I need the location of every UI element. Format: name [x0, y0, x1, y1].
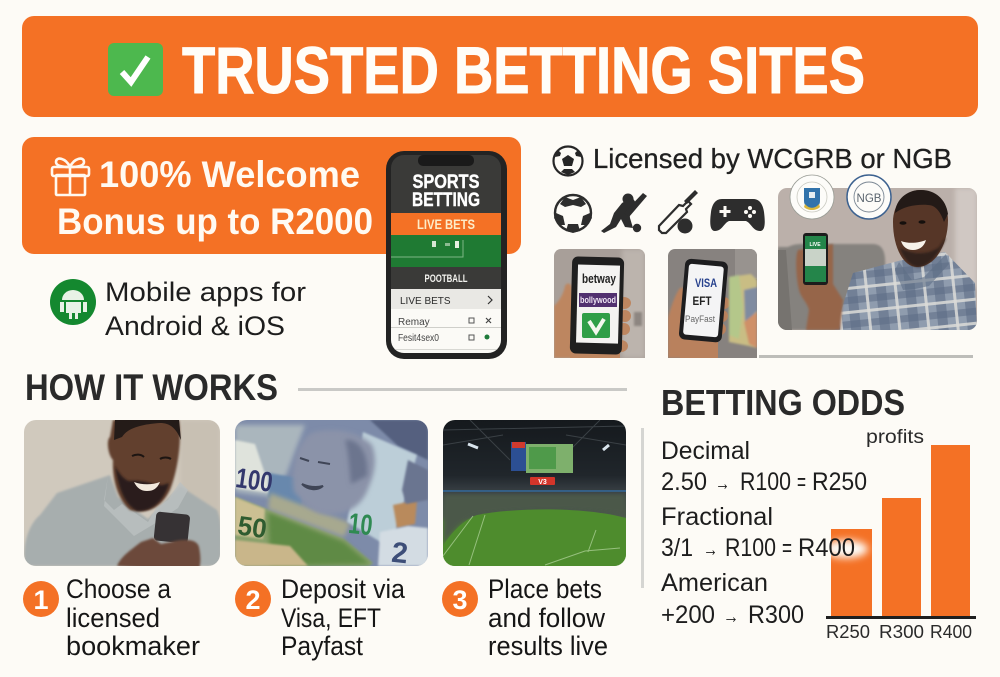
right notes	[393, 500, 417, 528]
decimal odds: →	[715, 473, 730, 495]
bollywood bar: bollywood	[580, 295, 616, 306]
photo: rand banknotes	[234, 420, 428, 570]
bonus text: Bonus up to R2000	[57, 201, 373, 242]
decimal odds: 2.50	[661, 468, 707, 496]
betting odds heading: BETTING ODDS	[661, 382, 905, 423]
sofa	[778, 244, 888, 330]
step 3 text: and follow	[488, 603, 605, 633]
banknote numerals	[236, 468, 407, 564]
bar labels: R300	[879, 622, 924, 642]
step 1	[23, 420, 222, 661]
icon: game controller	[710, 199, 765, 231]
pitch strip	[391, 235, 501, 267]
photo: man with phone	[778, 188, 977, 330]
held phone: LIVE	[809, 242, 821, 248]
head	[108, 420, 180, 511]
step 2 text	[281, 574, 406, 661]
banknote numerals: 10	[347, 508, 374, 542]
fractional odds: R400	[798, 534, 855, 562]
badge 2	[235, 581, 271, 617]
american odds	[661, 569, 804, 629]
left pale note	[235, 425, 305, 497]
step 2	[234, 420, 428, 661]
bets list: Fesit4sex0	[398, 333, 439, 344]
step 2 text: Payfast	[281, 631, 363, 661]
licensing text: Licensed by WCGRB or NGB	[593, 143, 952, 174]
badge 1: 1	[33, 585, 49, 615]
icon: green check	[108, 43, 163, 96]
american odds: R300	[748, 601, 804, 629]
app text: Android & iOS	[105, 311, 285, 341]
step 1 text: licensed	[66, 603, 160, 633]
american odds: American	[661, 569, 768, 597]
title banner	[22, 16, 978, 117]
licensed heading	[554, 143, 952, 176]
icon: soccer ball outline	[554, 146, 582, 176]
face	[893, 190, 948, 267]
banknote numerals: 2	[390, 537, 409, 570]
step 2 text: Visa, EFT	[281, 603, 381, 633]
step 1 text: bookmaker	[66, 631, 200, 661]
badge 2: 2	[245, 585, 261, 615]
blue block	[268, 473, 305, 507]
photo: stadium	[443, 420, 626, 566]
photo: man smiling at phone	[24, 420, 222, 572]
step 3	[442, 420, 626, 661]
football label: POOTBALL	[424, 273, 468, 285]
shirt	[835, 252, 977, 330]
icon: android	[50, 279, 96, 325]
green check tile	[582, 313, 610, 338]
live bets bar: LIVE BETS	[417, 216, 475, 232]
hand	[668, 288, 730, 358]
bar chart	[824, 427, 976, 642]
step 3 text	[488, 574, 608, 661]
fractional odds: R100	[725, 534, 776, 562]
seal: WCGRB	[790, 175, 834, 219]
seal: NGB: NGB	[857, 193, 882, 205]
big screen: V3	[538, 479, 547, 486]
step 3 text: Place bets	[488, 574, 602, 604]
phone heading: SPORTS	[412, 172, 480, 193]
step 1 text	[66, 574, 200, 661]
live bets bar	[391, 213, 501, 235]
app text	[105, 277, 306, 341]
bar labels	[826, 622, 972, 642]
icon: cricket bat and ball	[659, 190, 698, 234]
banknotes	[729, 274, 757, 348]
decimal odds	[661, 437, 867, 496]
american odds: →	[723, 606, 739, 628]
bets list	[391, 289, 501, 353]
icon: cricket batsman	[601, 193, 647, 233]
fractional odds: →	[703, 539, 718, 561]
bonus text: 100% Welcome	[99, 154, 360, 195]
phone brand text: betway	[582, 272, 616, 286]
banknote numerals: 50	[236, 510, 269, 544]
how it works heading: HOW IT WORKS	[25, 367, 278, 408]
payment names	[685, 276, 717, 324]
step 2 text: Deposit via	[281, 574, 406, 604]
app availability	[50, 277, 306, 341]
photo: phone with payments	[668, 249, 757, 358]
payment names: PayFast	[685, 314, 715, 324]
decimal odds: R100	[740, 468, 791, 496]
hands	[116, 537, 202, 566]
bar labels: R250	[826, 622, 870, 642]
divider under photos	[759, 355, 973, 358]
phone	[154, 511, 190, 544]
phone mockup	[386, 151, 507, 359]
decimal odds: R250	[812, 468, 867, 496]
seals	[790, 175, 891, 219]
title text: TRUSTED BETTING SITES	[182, 33, 865, 107]
bar labels: R400	[930, 622, 972, 642]
fractional odds: Fractional	[661, 503, 773, 531]
bets list: Remay	[398, 317, 430, 328]
decimal odds: Decimal	[661, 437, 750, 465]
american odds: +200	[661, 601, 715, 629]
icon: gift	[52, 159, 89, 195]
sports icons	[554, 190, 765, 234]
chart caption: profits	[866, 427, 924, 448]
axis	[826, 616, 976, 619]
fractional odds	[661, 503, 855, 562]
payment names: VISA	[695, 276, 717, 290]
photo: phone with betway	[554, 249, 645, 358]
big screen	[511, 442, 573, 486]
bonus text	[57, 154, 373, 242]
fractional odds: =	[782, 534, 792, 562]
shirt	[24, 475, 222, 566]
portrait	[293, 430, 375, 514]
badge 3	[442, 581, 478, 617]
how it works heading	[25, 367, 627, 408]
phone heading: BETTING	[412, 190, 480, 211]
icon: soccer ball	[554, 195, 592, 233]
decimal odds: =	[797, 468, 806, 496]
pale right note	[347, 432, 417, 548]
phone heading	[412, 174, 480, 206]
vertical divider	[641, 428, 644, 588]
banknote numerals: 100	[234, 462, 275, 498]
payment names: EFT	[692, 296, 712, 308]
hand	[554, 284, 631, 358]
app text: Mobile apps for	[105, 277, 306, 307]
fractional odds: 3/1	[661, 534, 693, 562]
badge 3: 3	[452, 585, 468, 615]
arm and hand	[796, 244, 843, 330]
held phone	[803, 233, 828, 285]
green and gold note	[235, 497, 373, 566]
odds list	[661, 437, 867, 629]
bets list: LIVE BETS	[400, 296, 451, 307]
step 1 text: Choose a	[66, 574, 172, 604]
badge 1	[23, 581, 59, 617]
bars	[831, 445, 970, 616]
panel: welcome bonus	[22, 137, 521, 254]
step 3 text: results live	[488, 631, 608, 661]
highlight behind odds text	[824, 540, 868, 558]
